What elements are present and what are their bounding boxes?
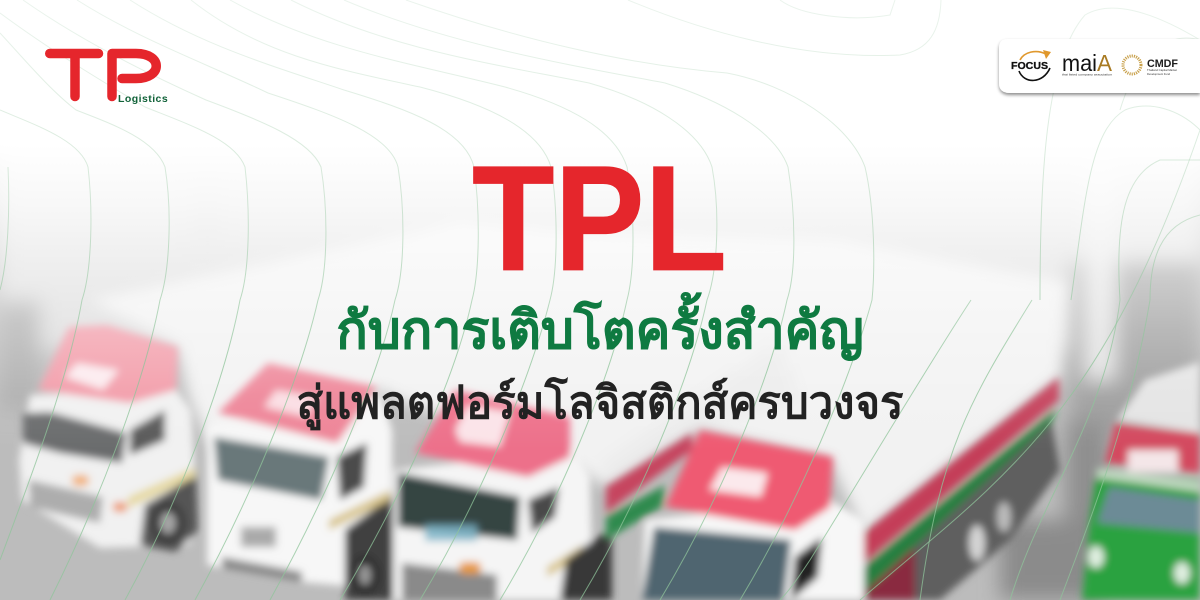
trailers bbox=[90, 222, 1065, 533]
maiA logo: thai listed company association bbox=[1062, 72, 1112, 76]
icon: FOCUS logo: FOCUS bbox=[1011, 61, 1048, 72]
TP Logistics logo: Logistics bbox=[118, 93, 168, 105]
subtitle: green heading: กับการเติบโตครั้งสำคัญ bbox=[336, 302, 864, 360]
truck 5 bbox=[1117, 362, 1200, 433]
CMDF logo text: CMDF bbox=[1147, 58, 1178, 70]
truck 1 bbox=[19, 390, 196, 548]
CMDF logo text: Development Fund bbox=[1147, 72, 1170, 76]
icon: FOCUS logo bbox=[1011, 50, 1051, 80]
CMDF logo text: Thailand Capital Market bbox=[1147, 68, 1177, 72]
truck 2 bbox=[207, 395, 392, 590]
title: TPL: TPL bbox=[472, 134, 727, 302]
truck 3 bbox=[394, 450, 592, 600]
subtitle: dark heading: สู่แพลตฟอร์มโลจิสติกส์ครบวงจร bbox=[296, 377, 904, 428]
icon: CMDF ring bbox=[1123, 56, 1141, 74]
truck 4 bbox=[642, 500, 864, 600]
maiA logo: A bbox=[1097, 50, 1113, 76]
CMDF logo text bbox=[1147, 58, 1178, 76]
maiA logo: mai bbox=[1062, 50, 1097, 76]
trailer 4 stripes and underside bbox=[864, 377, 1059, 563]
trailer 3 stripes bbox=[606, 433, 692, 513]
